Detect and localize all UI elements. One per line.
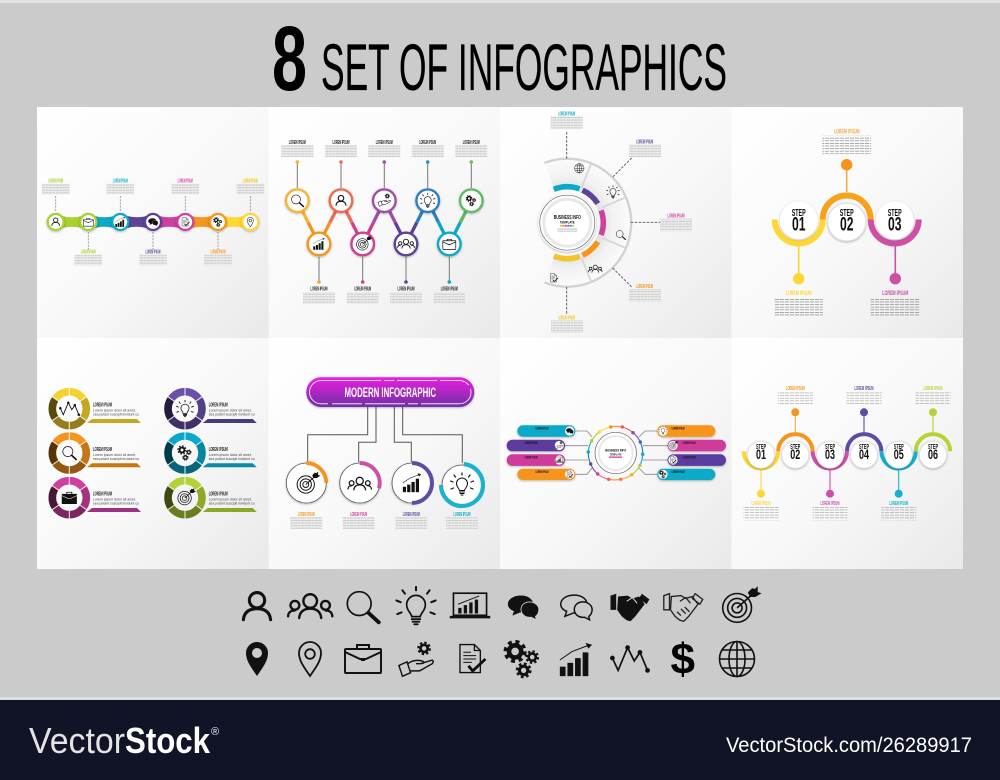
- dashed leaders: [56, 196, 250, 251]
- icon: document check: [460, 645, 485, 673]
- ring item: purple bulb: sea putant suscipit invidunt cu: [209, 412, 255, 416]
- footer logo: Vector: [29, 720, 125, 761]
- labels: LOREM IPSUM: [752, 501, 770, 507]
- step 06: STEP: [928, 444, 938, 451]
- labels: LOREM IPSUM: [178, 178, 193, 184]
- labels: LOREM IPSUM: [636, 284, 653, 290]
- title: [272, 8, 727, 110]
- panel 6: modern infographic tree: [268, 338, 500, 569]
- node: briefcase: [80, 214, 96, 230]
- labels: LOREM IPSUM: [463, 140, 480, 146]
- labels: LOREM IPSUM: [113, 178, 128, 184]
- stems and pins: [296, 160, 473, 284]
- labels: LOREM IPSUM: [403, 512, 420, 518]
- right pill 3: [668, 454, 726, 466]
- node: document: [177, 214, 193, 230]
- centre badge: TEMPLATE: [560, 220, 575, 224]
- circle: target: [286, 463, 326, 503]
- left pill 2: [507, 440, 565, 451]
- labels: [42, 178, 264, 265]
- labels: LOREM IPSUM: [668, 214, 684, 220]
- ring item: orange search: [52, 432, 141, 474]
- connector band: [60, 216, 246, 228]
- icon: briefcase: [345, 645, 381, 673]
- labels: LOREM IPSUM: [376, 140, 393, 146]
- labels: LOREM IPSUM: [354, 286, 371, 292]
- ring item: yellow wave: sea putant suscipit invidunt cu: [93, 412, 139, 416]
- labels: LOREM IPSUM: [441, 286, 458, 292]
- ring item: purple bulb: LOREM IPSUM: [209, 403, 228, 409]
- ring item: purple bulb: [168, 388, 257, 430]
- hub centre: [595, 432, 636, 474]
- step 02: 02: [790, 446, 800, 462]
- hub dots: [587, 425, 644, 481]
- icon: zigzag line: [611, 646, 649, 672]
- labels: [774, 128, 919, 316]
- right pill 1: LOREM IPSUM: [672, 426, 685, 430]
- ring item: teal gears: Lorem ipsum dolor sit amet,: [209, 453, 252, 457]
- panel 8: six steps: [732, 338, 963, 569]
- panel 5: six segmented rings: [37, 338, 268, 569]
- fan sectors: [544, 159, 631, 287]
- left pill 3: LOREM IPSUM: [524, 456, 538, 460]
- labels: [290, 512, 478, 529]
- right pill 2: LOREM IPSUM: [682, 441, 696, 445]
- labels: LOREM IPSUM: [298, 512, 315, 518]
- labels: LOREM IPSUM: [882, 290, 908, 297]
- ring item: magenta briefcase: sea putant suscipit invidunt cu: [93, 502, 139, 506]
- step 04: [859, 444, 869, 462]
- ring item: orange search: LOREM IPSUM: [93, 447, 112, 453]
- ring item: teal gears: [168, 432, 257, 474]
- step 01: [748, 441, 774, 468]
- centre badge: BUSINESS INFO: [554, 215, 581, 221]
- icon: document: [550, 274, 558, 282]
- icon: pin outline: [299, 642, 321, 676]
- title: 8: [272, 8, 307, 110]
- node: bulb: [416, 189, 439, 212]
- labels: LOREM IPSUM: [454, 512, 470, 518]
- step 01: [780, 201, 818, 239]
- icon: bulb: [396, 587, 436, 624]
- step 04: STEP: [859, 444, 869, 451]
- right pill 4: [657, 469, 715, 480]
- icon: hand with gear: [399, 643, 433, 676]
- step 01: 01: [792, 213, 806, 235]
- panel 7: hub with pills: [500, 338, 732, 569]
- top strip: [0, 0, 1000, 3]
- node: hand with gear: [373, 189, 396, 212]
- labels: LOREM IPSUM: [289, 140, 306, 146]
- centre badge: [538, 194, 596, 252]
- hub centre: TEMPLATE: [610, 452, 622, 456]
- left pill 2: LOREM IPSUM: [524, 441, 538, 445]
- icon set row 1: [243, 587, 760, 624]
- step 01: 01: [756, 446, 766, 462]
- labels: LOREM IPSUM: [310, 286, 328, 292]
- labels: LOREM IPSUM: [81, 250, 96, 256]
- icon: user: [243, 593, 271, 620]
- footer logo: Stock: [125, 720, 211, 761]
- circle: bars: [392, 463, 432, 503]
- icon: pin solid: [246, 642, 268, 676]
- icon: search: [616, 230, 625, 240]
- footer band: [0, 700, 1000, 780]
- hub ring with coloured arcs: [588, 426, 643, 480]
- zigzag connector: [297, 201, 471, 244]
- labels: LOREM IPSUM: [419, 140, 436, 146]
- ring item: magenta briefcase: LOREM IPSUM: [93, 492, 112, 498]
- icon set row 2: [246, 635, 754, 684]
- labels: LOREM IPSUM: [48, 178, 63, 184]
- step 01: STEP: [792, 208, 806, 219]
- icon: gears: [505, 642, 538, 677]
- step 02: 02: [840, 213, 854, 235]
- panel 4: three steps: [732, 107, 963, 338]
- icon: dollar: $: [671, 635, 695, 684]
- node: people: [395, 233, 417, 255]
- node: bars: [112, 214, 128, 230]
- labels: LOREM IPSUM: [210, 250, 226, 256]
- node: chat: [145, 214, 161, 230]
- icon: bulb: [607, 186, 619, 198]
- hub centre: BUSINESS INFO: [605, 448, 626, 452]
- labels: LOREM IPSUM: [558, 316, 575, 322]
- node: user: [48, 214, 64, 230]
- ring item: green target: LOREM IPSUM: [209, 492, 228, 498]
- right pill 2: [668, 440, 726, 451]
- step 03: [816, 441, 844, 468]
- node: gears: [210, 214, 226, 230]
- icon: people: [288, 594, 332, 618]
- step 03: [876, 201, 914, 239]
- wave arcs: [744, 434, 950, 468]
- labels: LOREM IPSUM: [854, 386, 874, 392]
- step circles behind arcs: [782, 441, 946, 468]
- panel 2: zigzag chain: [268, 107, 500, 338]
- icon: chat outline: [561, 595, 592, 620]
- divider strip: [0, 697, 1000, 700]
- right pill 4: LOREM IPSUM: [672, 470, 685, 474]
- node: gears: [460, 189, 483, 212]
- step 05: 05: [894, 446, 904, 462]
- labels: [744, 386, 950, 520]
- labels: LOREM IPSUM: [834, 128, 860, 136]
- step 05: [885, 441, 912, 468]
- icon: people: [589, 265, 602, 272]
- right pill 3: LOREM IPSUM: [682, 456, 696, 460]
- node: target: [351, 233, 374, 255]
- icon: chat solid: [507, 595, 539, 620]
- step 03: STEP: [825, 444, 835, 451]
- step 05: STEP: [894, 444, 904, 451]
- left pill 1: [517, 425, 575, 437]
- panel 3: radial fan: [500, 107, 732, 338]
- right pill 1: [657, 425, 715, 437]
- stems and pins: [757, 408, 937, 498]
- node: briefcase: [438, 233, 461, 255]
- labels: LOREM IPSUM: [146, 250, 160, 256]
- ring item: green target: sea putant suscipit invidunt cu: [209, 502, 255, 506]
- ring item: magenta briefcase: Lorem ipsum dolor sit amet,: [93, 498, 136, 502]
- ring item: teal gears: sea putant suscipit invidunt cu: [209, 457, 255, 461]
- wave arcs: [775, 196, 919, 244]
- icon: bar chart: [560, 643, 592, 676]
- connector lines: [308, 407, 462, 463]
- labels: LOREM IPSUM: [786, 386, 805, 392]
- connector lines: [565, 431, 668, 474]
- icon: target: [723, 588, 760, 622]
- labels: LOREM IPSUM: [243, 178, 258, 184]
- step 02: [840, 208, 854, 235]
- left pill 4: LOREM IPSUM: [536, 470, 549, 474]
- ring item: green target: Lorem ipsum dolor sit amet,: [209, 498, 252, 502]
- labels: LOREM IPSUM: [558, 112, 575, 118]
- node: user: [330, 189, 352, 212]
- ring item: yellow wave: Lorem ipsum dolor sit amet,: [93, 408, 136, 412]
- step 02 circle: [828, 203, 866, 241]
- ring item: teal gears: LOREM IPSUM: [209, 447, 228, 453]
- icon: globe: [720, 642, 754, 676]
- dashed leaders: [567, 132, 660, 314]
- circle: people: [340, 463, 380, 503]
- ring item: purple bulb: Lorem ipsum dolor sit amet,: [209, 408, 252, 412]
- labels: LOREM IPSUM: [924, 386, 942, 392]
- ring item: orange search: Lorem ipsum dolor sit amet,: [93, 453, 136, 457]
- step 02: STEP: [790, 444, 800, 451]
- step 04: 04: [859, 446, 869, 462]
- left pill 3: [507, 454, 565, 466]
- step 03: 03: [888, 213, 902, 235]
- labels: LOREM IPSUM: [889, 501, 908, 507]
- heading pill: [306, 377, 474, 407]
- node: bars: [308, 233, 330, 255]
- step 02: [790, 444, 800, 462]
- labels: [281, 140, 487, 304]
- labels: LOREM IPSUM: [636, 140, 653, 146]
- icon: handshake solid: [610, 594, 649, 621]
- node: pin: [242, 214, 258, 230]
- left pill 1: LOREM IPSUM: [536, 426, 549, 430]
- step 06: 06: [928, 446, 938, 462]
- icon: laptop chart: [450, 593, 490, 617]
- labels: [551, 112, 692, 333]
- ring item: green target: [168, 477, 257, 519]
- stems and pins: [793, 159, 901, 284]
- panel 1: horizontal timeline: [37, 107, 268, 338]
- circle: bulb: [441, 464, 483, 506]
- icon: search: [347, 592, 379, 622]
- step 06: [928, 444, 938, 462]
- labels: LOREM IPSUM: [786, 290, 812, 297]
- labels: LOREM IPSUM: [332, 140, 350, 146]
- footer url: VectorStock.com/26289917: [726, 734, 972, 757]
- step 02: STEP: [840, 208, 854, 219]
- labels: LOREM IPSUM: [398, 286, 414, 292]
- node: search: [286, 189, 309, 212]
- footer logo: [29, 720, 219, 761]
- labels: LOREM IPSUM: [820, 501, 840, 507]
- heading pill: MODERN INFOGRAPHIC: [345, 384, 436, 400]
- ring item: magenta briefcase: [52, 477, 141, 519]
- icon: handshake outline: [664, 594, 703, 621]
- labels: LOREM IPSUM: [350, 512, 367, 518]
- icon: globe: [575, 164, 584, 173]
- step 03: 03: [825, 446, 835, 462]
- ring item: orange search: sea putant suscipit invidunt cu: [93, 457, 139, 461]
- coloured inner arcs: [554, 187, 603, 259]
- footer logo: ®: [211, 726, 219, 738]
- ring item: yellow wave: [52, 388, 141, 430]
- step 03: STEP: [888, 208, 902, 219]
- left pill 4: [517, 469, 575, 480]
- step 01: STEP: [756, 444, 766, 451]
- ring item: yellow wave: LOREM IPSUM: [93, 403, 112, 409]
